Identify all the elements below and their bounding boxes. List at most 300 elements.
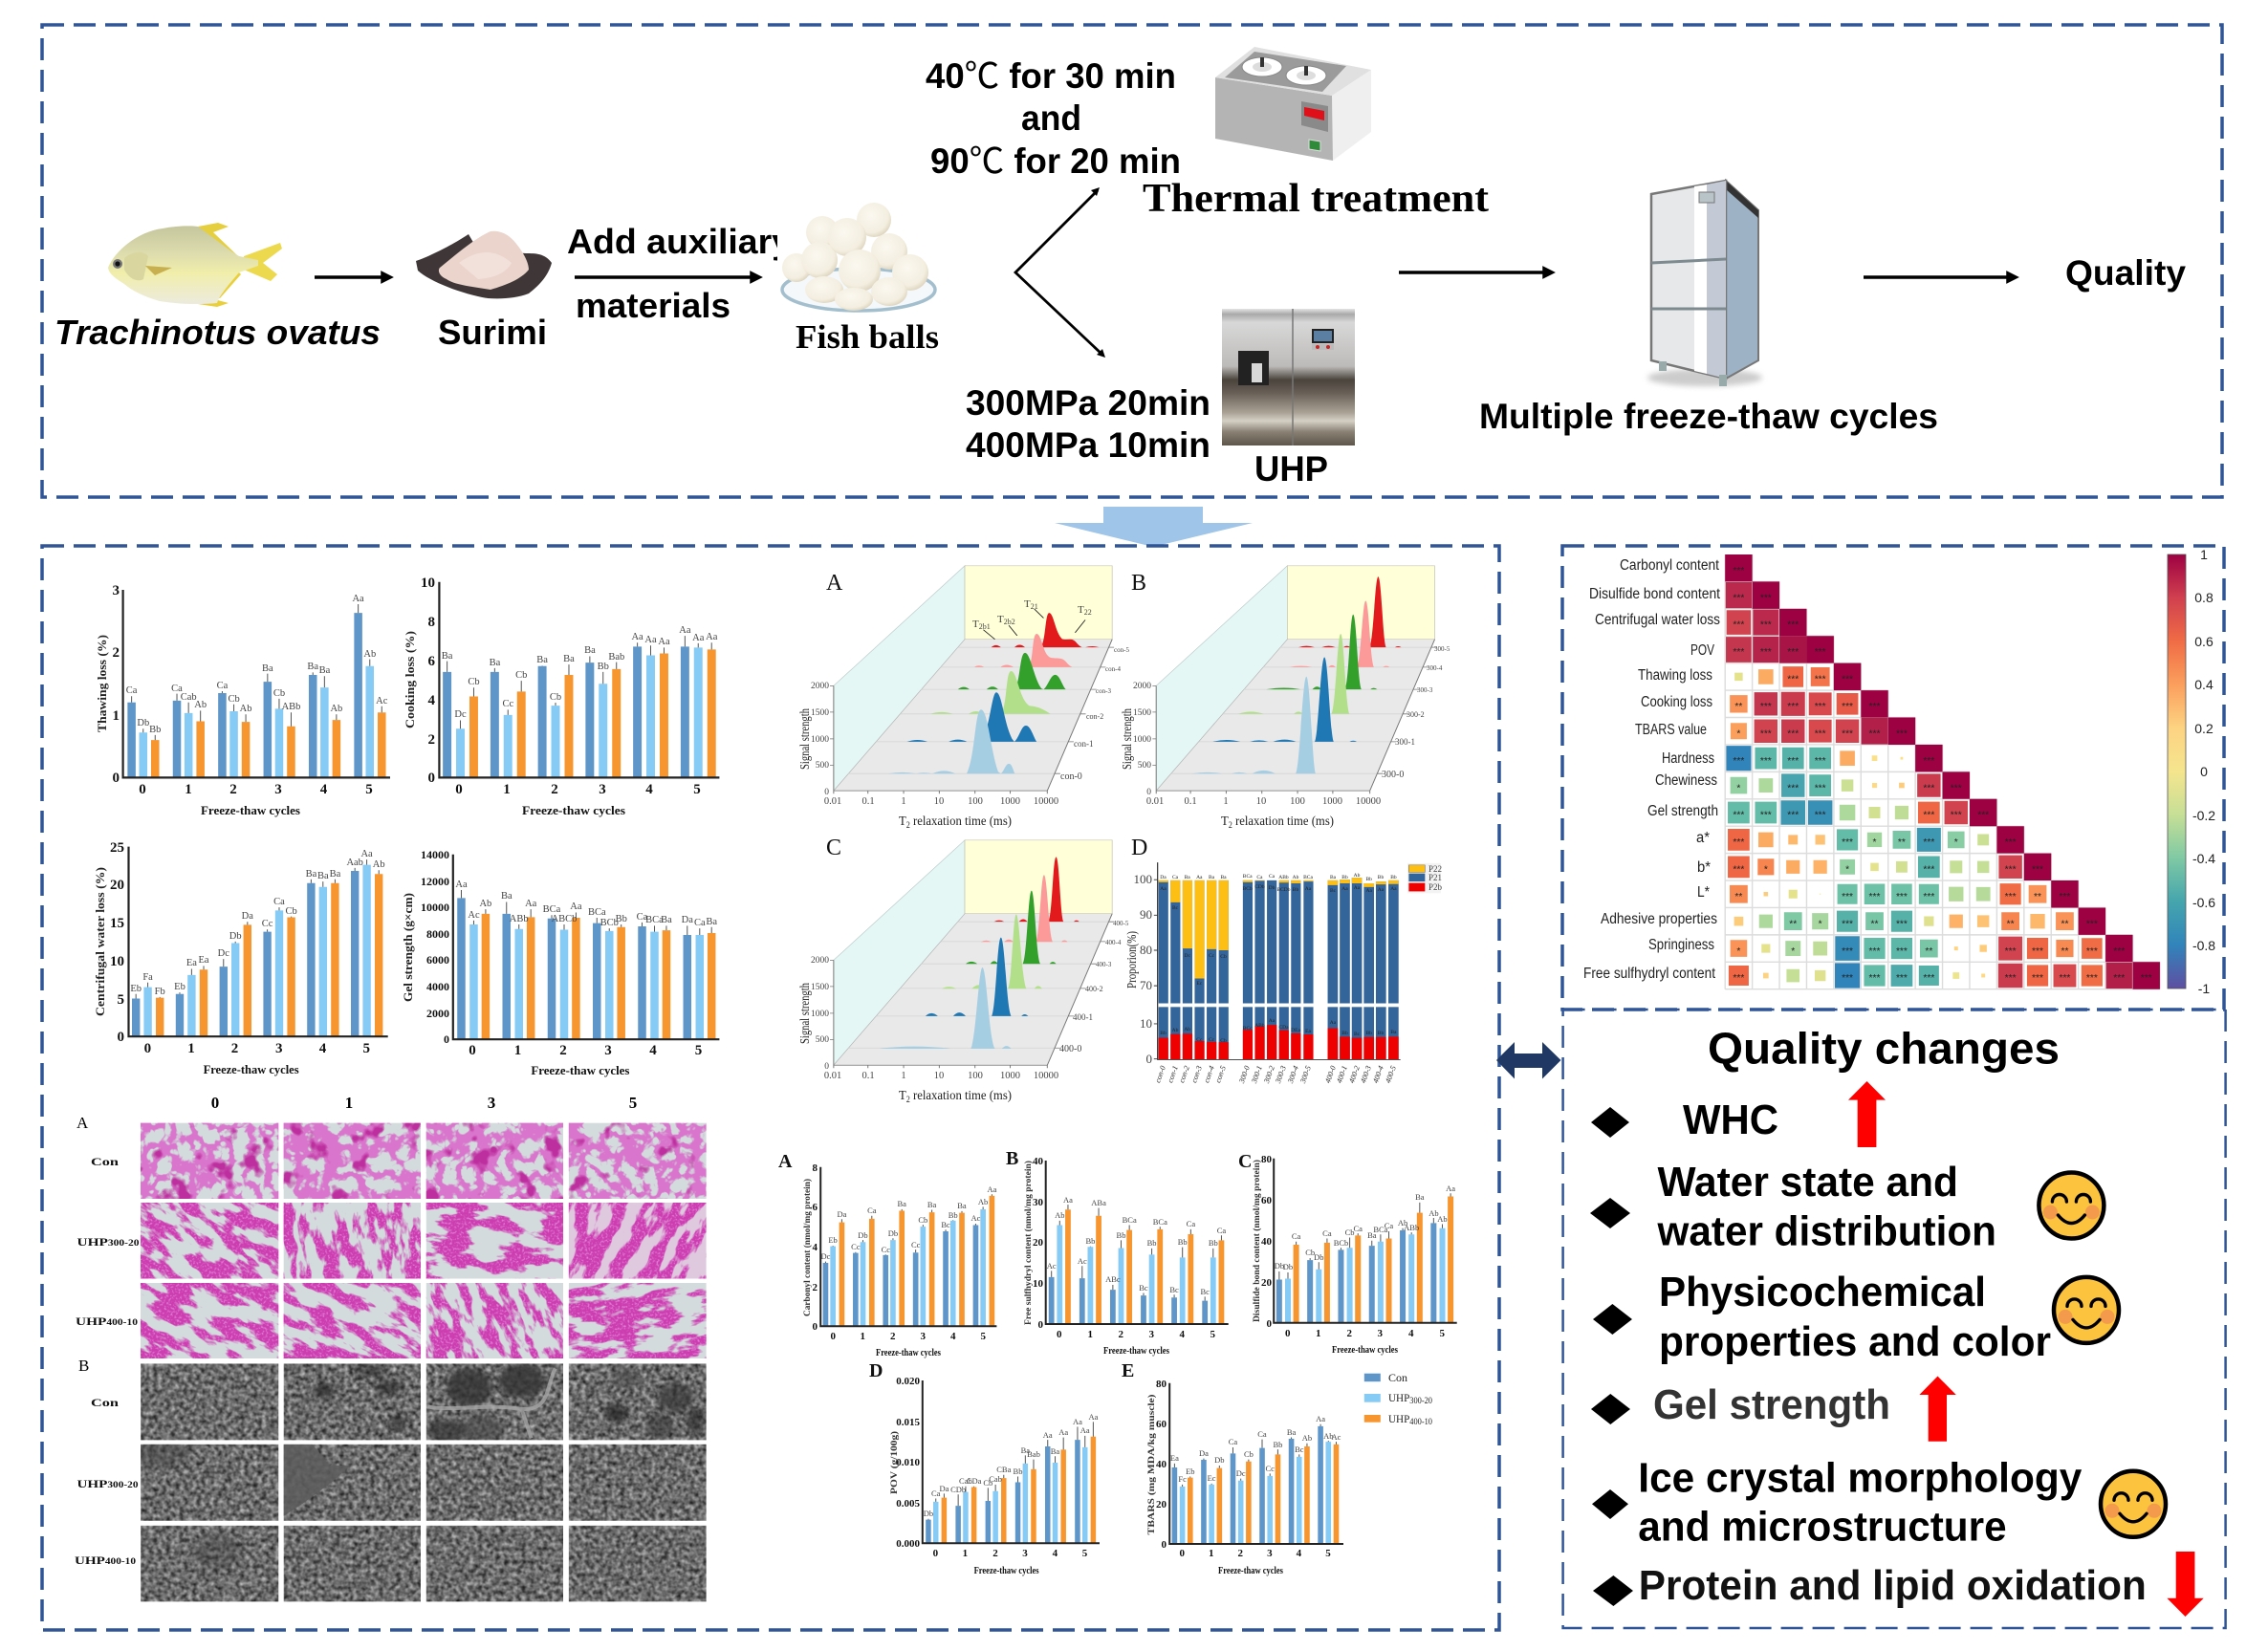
item: ice crystal: and microstructure <box>1638 1503 2007 1550</box>
heatmap grid: *** <box>1842 837 1853 848</box>
bar chart: free sulfhydryl content: Bb <box>1178 1237 1188 1247</box>
heatmap grid: *** <box>1760 811 1772 821</box>
heatmap row labels: L* <box>1697 884 1710 901</box>
chart: stacked water proportions panel D: Ca <box>1256 875 1263 880</box>
bar chart: disulfide bond content: Db <box>1314 1252 1323 1262</box>
heatmap colorbar: 0.6 <box>2194 634 2213 649</box>
bar chart: TBARS: Dc <box>1236 1468 1246 1478</box>
item: oxidation: Protein and lipid oxidation <box>1639 1562 2147 1609</box>
heatmap row labels: Cooking loss <box>1641 694 1712 710</box>
bar chart: carbonyl content: Ac <box>971 1213 981 1223</box>
bar chart: TBARS: Da <box>1199 1448 1209 1458</box>
bar chart: centrifugal water loss: Ba <box>306 869 317 880</box>
chart: stacked water proportions panel D: Cb <box>1220 1038 1227 1044</box>
bar chart: POV: 0.010 <box>896 1457 920 1468</box>
bar chart: disulfide bond content: Db <box>1275 1261 1284 1271</box>
bar chart: carbonyl content: Da <box>837 1209 847 1219</box>
bar chart: TBARS: Bc <box>1295 1445 1304 1454</box>
bar chart: gel strength: Aa <box>525 899 537 909</box>
bar chart: TBARS: Ac <box>1332 1432 1341 1442</box>
bar chart: carbonyl content: A <box>778 1151 793 1172</box>
heatmap grid: *** <box>1787 728 1799 739</box>
bar chart: gel strength: 2 <box>559 1043 567 1058</box>
bar chart: TBARS: 3 <box>1267 1548 1273 1559</box>
chart: LF-NMR relaxation panel B: 1000 <box>1133 735 1151 745</box>
panel letter A: A <box>76 1114 89 1132</box>
bar chart: disulfide bond content: Ca <box>1292 1231 1301 1241</box>
chart: LF-NMR relaxation panel C: 400-5 <box>1113 920 1129 927</box>
item: water state: Water state and <box>1658 1159 1958 1206</box>
chart: LF-NMR relaxation panel C: 1500 <box>811 983 829 992</box>
item: physicochemical <box>1593 1269 2119 1365</box>
bar chart: disulfide bond content: 2 <box>1346 1328 1352 1339</box>
bar chart: centrifugal water loss: 3 <box>275 1041 282 1056</box>
bar chart: TBARS: 0 <box>1180 1548 1186 1559</box>
bar chart: free sulfhydryl content: Bc <box>1139 1283 1148 1293</box>
bar chart: thawing loss: Ba <box>307 662 318 672</box>
bar chart: POV: Ba <box>1021 1445 1030 1455</box>
bar chart: POV: 2 <box>992 1548 998 1559</box>
bar chart: TBARS: Eb <box>1186 1466 1195 1476</box>
heatmap grid: ** <box>1871 919 1879 929</box>
bar chart: free sulfhydryl content: Ab <box>1055 1210 1064 1220</box>
bar chart: free sulfhydryl content: Aa <box>1063 1195 1073 1205</box>
row labels SEM: UHP 400-10 <box>75 1553 137 1567</box>
heatmap grid: *** <box>2032 946 2043 957</box>
bar chart: carbonyl content: 5 <box>981 1331 987 1342</box>
heatmap grid: *** <box>1842 973 1853 984</box>
bar chart: gel strength: Gel strength (g×cm) <box>401 893 415 1002</box>
chart: stacked water proportions panel D: Ba <box>1209 875 1215 880</box>
micrographs: SEM images <box>75 1357 708 1603</box>
heatmap grid: *** <box>2005 973 2017 984</box>
bar chart: POV: CDa <box>967 1476 982 1486</box>
chart: stacked water proportions panel D: P21 <box>1428 873 1442 882</box>
heatmap colorbar: -0.2 <box>2192 808 2215 823</box>
bar chart: carbonyl content: Ba <box>927 1200 937 1209</box>
heatmap grid: ** <box>1734 892 1742 902</box>
heatmap row labels: Carbonyl content <box>1620 557 1720 574</box>
text: thermal conditions: 40℃ for 30 min <box>926 56 1176 96</box>
bar chart: disulfide bond content <box>1238 1151 1457 1356</box>
chart: LF-NMR relaxation panel A: con-0 <box>1060 771 1082 782</box>
row labels: Con <box>91 1155 119 1168</box>
heatmap colorbar: -0.4 <box>2192 851 2215 866</box>
bar chart: thawing loss: Db <box>137 718 149 728</box>
heatmap colorbar: -0.8 <box>2192 938 2215 953</box>
heatmap row labels: Springiness <box>1648 937 1714 953</box>
bar chart: carbonyl content: Eb <box>828 1235 838 1245</box>
chart: LF-NMR relaxation panel A: con-5 <box>1114 646 1129 654</box>
chart: stacked water proportions panel D: con-1 <box>1166 1065 1180 1084</box>
chart: LF-NMR relaxation panel A: 22 <box>1084 608 1092 617</box>
bar chart: POV: 0 <box>933 1548 939 1559</box>
chart: LF-NMR relaxation panel C: 400-3 <box>1096 961 1112 968</box>
bar chart: POV: Ca <box>931 1488 941 1498</box>
bar chart: disulfide bond content: Db <box>1283 1262 1293 1271</box>
bar chart: centrifugal water loss: Ba <box>330 869 341 880</box>
bar chart: POV: Cb <box>983 1478 992 1488</box>
chart: stacked water proportions panel D: Bb <box>1390 875 1397 880</box>
bar chart: thawing loss: ABb <box>282 702 300 712</box>
chart: LF-NMR relaxation panel B: 2000 <box>1133 682 1151 691</box>
heatmap row labels: b* <box>1697 859 1711 876</box>
heatmap grid: *** <box>1733 566 1744 576</box>
heatmap grid: *** <box>1760 728 1772 739</box>
heatmap grid: *** <box>1760 593 1772 603</box>
bar chart: TBARS: Ca <box>1257 1429 1267 1439</box>
heatmap row labels: Adhesive properties <box>1601 911 1717 927</box>
bar chart: centrifugal water loss: Da <box>242 911 253 922</box>
chart: stacked water proportions panel D: Aa <box>1365 888 1372 894</box>
bar chart: POV: 5 <box>1082 1548 1088 1559</box>
bar chart: carbonyl content: 0 <box>831 1331 837 1342</box>
bar chart: gel strength: Ac <box>468 910 480 921</box>
bar chart: POV: Da <box>939 1484 949 1493</box>
bar chart: free sulfhydryl content: Free sulfhydryl content (nmol/mg protein) <box>1023 1161 1034 1325</box>
bar chart: centrifugal water loss: Ca <box>273 897 285 907</box>
bar chart: POV: Bb <box>1014 1466 1022 1476</box>
chart: stacked water proportions panel D: 300-1 <box>1250 1065 1264 1085</box>
chart: stacked water proportions panel D: Aa <box>1354 885 1361 891</box>
bar chart: free sulfhydryl content: B <box>1006 1148 1018 1169</box>
bar chart: carbonyl content: Cc <box>882 1245 890 1254</box>
chart: stacked water proportions panel D: Aa <box>1390 886 1397 892</box>
bar chart: disulfide bond content: Freeze-thaw cycles <box>1332 1345 1398 1356</box>
heatmap grid: ** <box>2061 946 2068 957</box>
bar chart: disulfide bond content: 40 <box>1261 1236 1272 1248</box>
chart: LF-NMR relaxation panel C: 1 <box>901 1071 906 1081</box>
chart legend: Con, UHP300-20, UHP400-10 <box>1364 1371 1432 1426</box>
heatmap grid: ** <box>1789 919 1797 929</box>
bar chart: cooking loss: Aa <box>706 632 718 642</box>
heatmap colorbar: 0.2 <box>2194 721 2213 736</box>
bar chart: TBARS: Bb <box>1273 1440 1282 1449</box>
bar chart: free sulfhydryl content: Bc <box>1200 1287 1210 1296</box>
bar chart: POV: 0.020 <box>896 1376 920 1387</box>
bar chart: free sulfhydryl content: 4 <box>1180 1329 1186 1340</box>
bar chart: POV: Aa <box>1043 1430 1053 1440</box>
bar chart: disulfide bond content: Ca <box>1353 1224 1363 1233</box>
chart: LF-NMR relaxation panel A: 2000 <box>811 682 829 691</box>
bar chart: carbonyl content: Db <box>858 1230 868 1240</box>
bar chart: free sulfhydryl content: BCa <box>1153 1217 1167 1227</box>
chart: LF-NMR relaxation panel C: 400-1 <box>1073 1012 1093 1022</box>
arrow: fish to surimi <box>315 273 390 281</box>
chart: LF-NMR relaxation panel A: 2 <box>906 820 910 830</box>
chart: LF-NMR relaxation panel C: C <box>826 836 841 860</box>
bar chart: cooking loss: Cc <box>502 699 513 709</box>
heatmap grid: *** <box>1842 919 1853 929</box>
chart: stacked water proportions panel D: Cb <box>1220 954 1227 960</box>
heatmap grid: *** <box>1923 973 1934 984</box>
bar chart: thawing loss: Ac <box>376 696 388 706</box>
column headings: 1 <box>345 1094 353 1112</box>
bar chart: centrifugal water loss: Dc <box>218 948 229 959</box>
bar chart: cooking loss: Cooking loss (%) <box>403 631 417 728</box>
chart: stacked water proportions panel D: Ba <box>1220 875 1227 880</box>
bar chart: carbonyl content <box>778 1151 997 1358</box>
chart: LF-NMR relaxation panel A: A <box>826 571 843 596</box>
bar chart: free sulfhydryl content: 20 <box>1033 1237 1044 1249</box>
bar chart: TBARS: Ca <box>1229 1437 1237 1446</box>
chart: LF-NMR relaxation panel A: 1500 <box>811 708 829 718</box>
bar chart: cooking loss: Ba <box>442 651 453 662</box>
chart: stacked water proportions panel D: Bb <box>1365 1031 1372 1036</box>
bar chart: gel strength: 5 <box>695 1043 702 1058</box>
chart: stacked water proportions panel D: Ab <box>1172 1028 1179 1033</box>
bar chart: TBARS: 5 <box>1325 1548 1331 1559</box>
heatmap row labels: a* <box>1696 830 1710 846</box>
chart: stacked water proportions panel D: 90 <box>1140 907 1152 922</box>
chart: LF-NMR relaxation panel C: 10000 <box>1034 1071 1058 1081</box>
bar chart: POV: D <box>869 1360 883 1381</box>
bar chart: POV: CBa <box>996 1465 1012 1474</box>
bar chart: centrifugal water loss: 5 <box>117 992 124 1008</box>
heatmap grid: *** <box>2086 973 2098 984</box>
bar chart: centrifugal water loss: Freeze-thaw cycles <box>204 1062 299 1076</box>
bar chart: thawing loss: Ca <box>217 681 229 691</box>
chart: LF-NMR relaxation panel A: 21 <box>1031 602 1038 611</box>
bar chart: carbonyl content: 4 <box>813 1242 818 1253</box>
heatmap grid: *** <box>2005 865 2017 876</box>
chart: LF-NMR relaxation panel C: 1000 <box>1000 1071 1020 1081</box>
bar chart: gel strength: 6000 <box>426 953 449 967</box>
bar chart: cooking loss: Bb <box>598 662 609 672</box>
heatmap grid <box>1725 554 2160 989</box>
heatmap row labels: POV <box>1690 642 1715 659</box>
bar chart: carbonyl content: 0 <box>813 1321 818 1333</box>
chart: stacked water proportions panel D: 70 <box>1140 978 1152 992</box>
chart: LF-NMR relaxation panel B: 2 <box>1229 820 1232 830</box>
heatmap grid: *** <box>1869 702 1880 712</box>
heatmap grid: *** <box>1977 811 1989 821</box>
row labels <box>76 1155 140 1328</box>
chart: stacked water proportions panel D: Bb <box>1293 887 1298 893</box>
bar chart: free sulfhydryl content <box>1006 1148 1229 1357</box>
bar chart: disulfide bond content: Ca <box>1322 1228 1332 1238</box>
bar chart: POV: 3 <box>1022 1548 1028 1559</box>
chart: LF-NMR relaxation panel B: 1000 <box>1322 796 1342 807</box>
chart: LF-NMR relaxation panel C: 1000 <box>811 1010 829 1019</box>
label: Add auxiliary: Add auxiliary <box>567 222 792 261</box>
heatmap grid: * <box>1873 837 1877 848</box>
bar chart: POV: Aa <box>1080 1425 1090 1435</box>
heatmap grid: *** <box>1842 946 1853 957</box>
heatmap grid: *** <box>1733 973 1744 984</box>
chart: stacked water proportions panel D: Bb <box>1341 875 1348 880</box>
bar chart: free sulfhydryl content: 0 <box>1038 1319 1044 1331</box>
bar chart: cooking loss: Aa <box>658 637 670 647</box>
bar chart: carbonyl content: 6 <box>813 1202 818 1213</box>
bar chart: thawing loss: Ca <box>171 684 183 694</box>
heatmap grid: * <box>1791 946 1795 957</box>
chart: stacked water proportions panel D: Bc <box>1172 905 1179 911</box>
chart: LF-NMR relaxation panel B: 10 <box>1256 796 1266 807</box>
bar chart: cooking loss: 5 <box>693 782 701 797</box>
chart: LF-NMR relaxation panel C: 0.01 <box>824 1071 841 1081</box>
chart: stacked water proportions panel D: Aa <box>1305 886 1312 892</box>
column headings: 3 <box>488 1094 495 1112</box>
chart: LF-NMR relaxation panel A: con-3 <box>1096 687 1111 695</box>
chart: LF-NMR relaxation panel B: 0 <box>1146 788 1151 797</box>
bar chart: gel strength: Aa <box>455 880 468 890</box>
heatmap grid: * <box>1819 919 1822 929</box>
micrographs: H&E stained sections <box>63 1094 777 1465</box>
bar chart: carbonyl content: 8 <box>813 1162 818 1174</box>
bar chart: POV: Cab <box>959 1476 972 1486</box>
heatmap grid: *** <box>1923 811 1934 821</box>
heatmap grid: *** <box>1815 647 1826 658</box>
bar chart: carbonyl content: Cc <box>851 1242 861 1251</box>
bar chart: gel strength: BCa <box>645 915 664 925</box>
heatmap row labels: Thawing loss <box>1638 667 1712 684</box>
chart: stacked water proportions panel D: Cc <box>1209 1037 1215 1043</box>
heatmap grid: *** <box>1842 702 1853 712</box>
heatmap colorbar: 0 <box>2200 764 2208 779</box>
bar chart: TBARS: Cb <box>1244 1449 1254 1459</box>
heatmap grid: *** <box>1923 892 1934 902</box>
item: oxidation <box>1593 1552 2204 1617</box>
bar chart: carbonyl content: Ab <box>978 1197 988 1206</box>
chart: LF-NMR relaxation panel A: 1 <box>901 796 906 807</box>
chart: LF-NMR relaxation panel B: 300-2 <box>1407 710 1425 719</box>
arrow: double-headed link <box>1496 1042 1560 1078</box>
big down arrow <box>1055 507 1253 547</box>
chart: stacked water proportions panel D: 100 <box>1134 872 1152 886</box>
bar chart: thawing loss: Ab <box>194 700 207 710</box>
chart: stacked water proportions panel D: BCa <box>1303 875 1313 880</box>
chart: stacked water proportions panel D: CDa <box>1278 1025 1289 1031</box>
heatmap colorbar: 1 <box>2200 547 2208 562</box>
item: gel strength: Gel strength <box>1653 1381 1890 1428</box>
bar chart: centrifugal water loss: 4 <box>319 1041 327 1056</box>
bar chart: gel strength: Bb <box>616 914 627 924</box>
chart: stacked water proportions panel D: 400-0 <box>1323 1065 1338 1084</box>
label: materials: materials <box>576 286 731 325</box>
bar chart: centrifugal water loss: Ab <box>373 859 385 870</box>
bar chart: cooking loss: 2 <box>428 732 435 748</box>
arrow: branch to two treatments <box>1015 187 1105 358</box>
heatmap grid: * <box>1736 783 1740 793</box>
label: Multiple freeze-thaw cycles: Multiple freeze-thaw cycles <box>1479 397 1938 436</box>
bar chart: carbonyl content: Bb <box>949 1210 958 1220</box>
bar chart: free sulfhydryl content: Ac <box>1047 1261 1057 1271</box>
heatmap colorbar <box>2168 547 2215 996</box>
item: ice crystal <box>1592 1454 2166 1550</box>
bar chart: TBARS: 40 <box>1156 1459 1167 1470</box>
chart: stacked water proportions panel D: Bb <box>1160 1031 1167 1036</box>
bar chart: centrifugal water loss: 15 <box>110 916 124 931</box>
bar chart: POV: Cab <box>989 1474 1002 1484</box>
heatmap grid: *** <box>1787 647 1799 658</box>
heatmap grid: * <box>1736 946 1740 957</box>
bar chart: thawing loss: 5 <box>365 782 373 797</box>
bar chart: free sulfhydryl content: 30 <box>1033 1197 1044 1208</box>
heatmap grid: *** <box>1896 973 1908 984</box>
bar chart: TBARS: Cc <box>1265 1464 1275 1473</box>
chart: LF-NMR relaxation panel B: B <box>1131 571 1146 596</box>
bar chart: centrifugal water loss: 10 <box>110 954 124 969</box>
bar chart: thawing loss: 3 <box>274 782 282 797</box>
bar chart: TBARS: 20 <box>1156 1499 1167 1510</box>
bar chart: TBARS: 1 <box>1209 1548 1214 1559</box>
icon: fish balls on plate <box>777 196 942 313</box>
chart: stacked water proportions panel D: 400-3 <box>1359 1065 1373 1084</box>
chart: stacked water proportions panel D: Bb <box>1365 877 1372 882</box>
bar chart: TBARS: TBARS (mg MDA/kg muscle) <box>1146 1394 1157 1535</box>
label: Surimi: Surimi <box>438 313 547 352</box>
chart: stacked water proportions panel D: Ab <box>1184 1027 1190 1032</box>
chart: LF-NMR relaxation panel B: 300-5 <box>1434 645 1450 653</box>
heatmap grid: *** <box>2086 919 2098 929</box>
bar chart: gel strength: ABCb <box>552 914 577 924</box>
bar chart: gel strength: Da <box>682 915 693 925</box>
bar chart: free sulfhydryl content: 0 <box>1057 1329 1062 1340</box>
bar chart: disulfide bond content: BCb <box>1334 1238 1348 1248</box>
bar chart: centrifugal water loss: 0 <box>144 1041 151 1056</box>
bar chart: carbonyl content: Dc <box>821 1251 831 1261</box>
heatmap grid: *** <box>2141 973 2152 984</box>
heatmap grid: *** <box>1760 756 1772 767</box>
bar chart: TBARS: 0 <box>1161 1539 1167 1551</box>
chart: LF-NMR relaxation panel A: 0.01 <box>824 796 841 807</box>
heatmap grid: *** <box>1896 946 1908 957</box>
chart: stacked water proportions panel D: 400-1 <box>1335 1065 1349 1084</box>
heatmap grid: ** <box>1898 837 1906 848</box>
bar chart: gel strength: 4000 <box>426 980 449 993</box>
chart: LF-NMR relaxation panel B: 0.1 <box>1184 796 1197 807</box>
chart: stacked water proportions panel D: 10 <box>1140 1016 1152 1031</box>
bar chart: centrifugal water loss: Aa <box>360 849 373 859</box>
chart: LF-NMR relaxation panel B <box>1121 566 1450 830</box>
chart: stacked water proportions panel D: con-4 <box>1202 1065 1216 1084</box>
bar chart: thawing loss: Thawing loss (%) <box>95 635 109 732</box>
icon: freezer <box>1647 181 1762 386</box>
chart: stacked water proportions panel D: Cc <box>1209 953 1215 959</box>
chart: stacked water proportions panel D: Ec <box>1196 981 1203 987</box>
heatmap grid: ** <box>2007 919 2015 929</box>
heatmap grid: *** <box>1733 647 1744 658</box>
heatmap grid: *** <box>1869 973 1880 984</box>
chart: LF-NMR relaxation panel A: relaxation time (ms) <box>910 815 1012 829</box>
bar chart: disulfide bond content: 1 <box>1316 1328 1321 1339</box>
chart: stacked water proportions panel D: con-2 <box>1177 1065 1191 1084</box>
bar chart: thawing loss: Ab <box>363 649 376 660</box>
bar chart: POV: 0.005 <box>896 1498 920 1510</box>
bar chart: TBARS: Fc <box>1178 1474 1187 1484</box>
bar chart: cooking loss: Ba <box>490 658 501 668</box>
heatmap row labels: Gel strength <box>1647 803 1718 819</box>
bar chart: gel strength: Ba <box>706 917 717 927</box>
bar chart: disulfide bond content: 0 <box>1266 1318 1272 1330</box>
bar chart: thawing loss: 0 <box>113 771 120 786</box>
chart: stacked water proportions panel D: Proporion(%) <box>1125 931 1140 988</box>
heatmap grid: *** <box>1787 620 1799 631</box>
chart: LF-NMR relaxation panel A: 500 <box>816 761 829 771</box>
chart: stacked water proportions panel D: Aa <box>1330 1020 1337 1026</box>
heatmap grid: *** <box>1815 811 1826 821</box>
column headings: 0 <box>211 1094 219 1112</box>
chart legend: Con, UHP300-20, UHP400-10: UHP <box>1388 1412 1411 1425</box>
bar chart: carbonyl content: Bc <box>941 1220 950 1229</box>
chart legend: Con, UHP300-20, UHP400-10: 400-10 <box>1409 1417 1432 1426</box>
chart: stacked water proportions panel D: Ab <box>1354 873 1361 879</box>
heatmap grid: *** <box>1760 647 1772 658</box>
label: Fish balls: Fish balls <box>796 318 939 356</box>
chart: LF-NMR relaxation panel A: 2b2 <box>1004 618 1015 626</box>
heatmap grid: *** <box>1869 946 1880 957</box>
